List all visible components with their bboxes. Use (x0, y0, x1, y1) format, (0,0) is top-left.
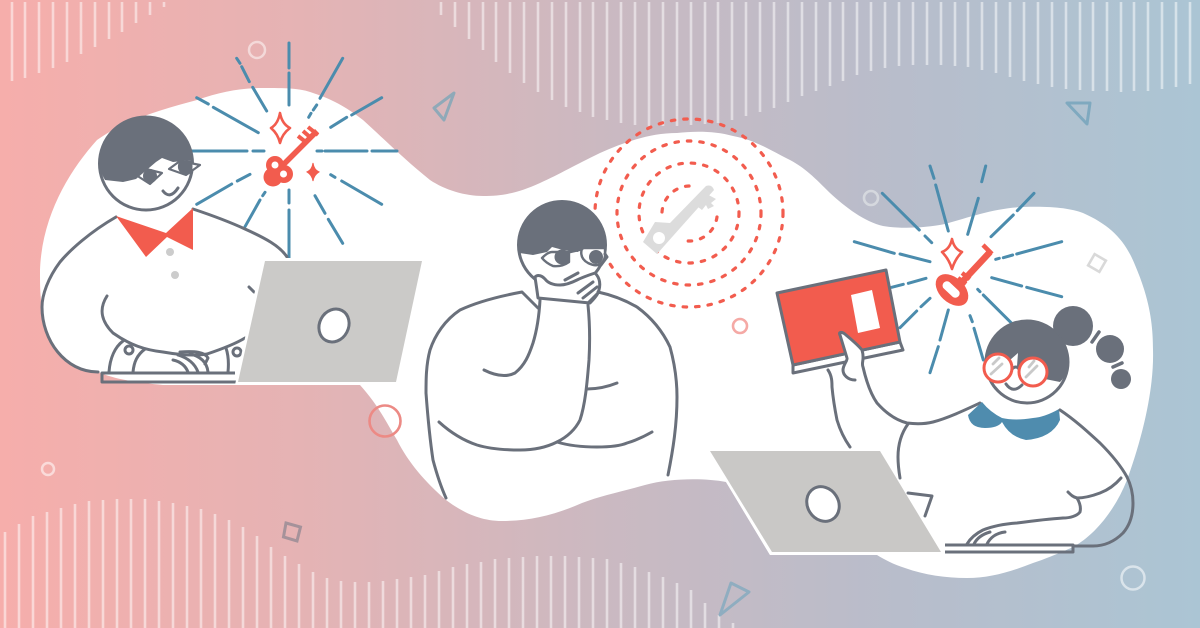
hair buns (1053, 306, 1131, 389)
head (100, 117, 200, 210)
light rays around key (192, 43, 397, 258)
icon: red key with loop (930, 245, 992, 312)
head (518, 201, 607, 288)
book (777, 270, 903, 373)
icon: outlined sparkle (271, 113, 290, 143)
arms and hands (102, 287, 254, 355)
person 3: woman with book and key (710, 166, 1133, 555)
small circles and diamond on blob (370, 191, 1106, 436)
keyboard (102, 373, 238, 382)
raised arm and hand (828, 332, 980, 447)
laptop (710, 451, 944, 555)
body outline (42, 209, 287, 372)
blue collar (968, 402, 1060, 440)
head (984, 321, 1068, 403)
hand on chin (535, 273, 600, 303)
icon: outlined sparkle (942, 239, 962, 269)
icon: red key (264, 127, 318, 186)
cuffs and fingers (109, 341, 241, 372)
keyboard (945, 545, 1073, 552)
striped wave: top left (12, 2, 164, 81)
red collar (116, 208, 193, 257)
concentric dashed circles (595, 119, 783, 307)
light rays around key (854, 166, 1062, 373)
white blob (40, 88, 1153, 578)
laptop (235, 258, 425, 385)
person 1: man at laptop with key (42, 43, 425, 385)
person 2: thinking man with faded key (426, 119, 783, 498)
striped wave: bottom (5, 499, 733, 628)
body and arm (898, 410, 1133, 546)
body and arms (426, 292, 677, 498)
striped wave: top centre (441, 2, 1190, 126)
icon: grey key (643, 186, 716, 254)
shirt buttons (166, 248, 179, 279)
icon: solid sparkle (307, 163, 319, 181)
